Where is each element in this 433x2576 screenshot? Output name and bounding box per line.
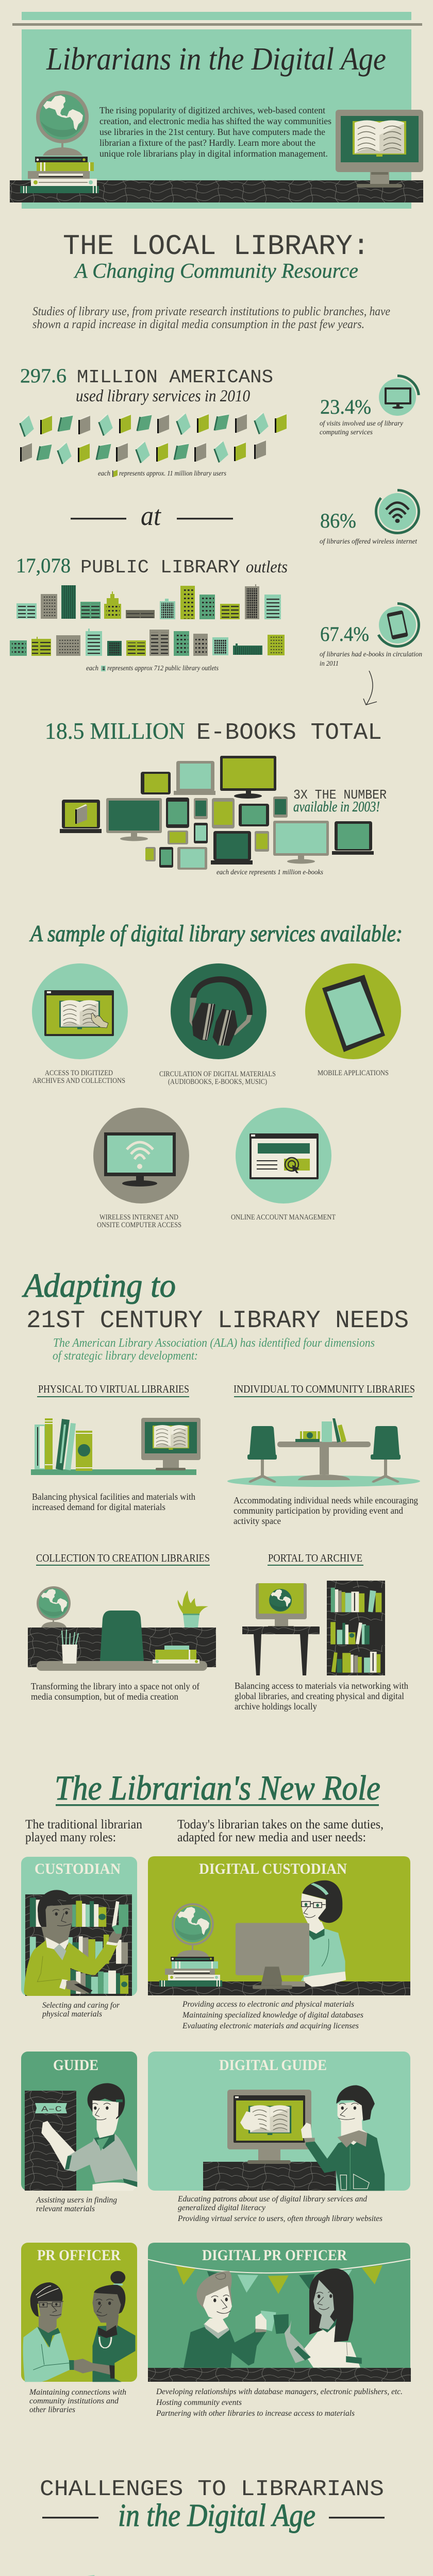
text [36,2196,117,2213]
heading: challenges: CHALLENGES TO LIBRARIANS [40,2477,384,2502]
stat: 67.4% e-books [320,604,422,667]
text: Assisting users in finding [36,2196,117,2205]
text: Maintaining specialized knowledge of digital databases [182,2011,363,2020]
legend: books: each [98,470,110,478]
panel: digital guide [148,2052,410,2223]
text [177,2195,382,2223]
caption: devices: each device represents 1 million e-books [216,869,323,876]
panel: collection to creation: COLLECTION TO CREATION LIBRARIES [36,1552,210,1564]
heading: CUSTODIAN [35,1860,121,1877]
stat: 67.4% e-books: 67.4% [320,622,369,646]
stat: 67.4% e-books: of libraries had e-books in circulation [320,650,422,658]
stat: 17,078 public library outlets: outlets [246,558,288,577]
intro: today's librarian [177,1818,384,1844]
service: circulation [159,963,276,1086]
illustration: two people shaking hands [23,2271,135,2382]
service: circulation: CIRCULATION OF DIGITAL MATERIALS [159,1070,276,1078]
intro: traditional librarian: The traditional librarian [25,1818,142,1832]
intro: today's librarian: adapted for new media and user needs: [177,1831,366,1844]
text: Educating patrons about use of digital library services and [177,2195,368,2204]
illustration: man at bookcase [24,1890,128,1996]
stat: 297.6 million americans: MILLION AMERICANS [77,367,273,388]
intro: traditional librarian [25,1818,142,1844]
stat: 18.5 million e-books [45,718,382,746]
stat: 86% wireless: 86% [320,509,356,532]
heading: the local library: THE LOCAL LIBRARY: [63,230,370,263]
scene: desk [28,1586,216,1671]
pictogram: buildings row 1 [16,584,281,619]
intro text: unique role librarians play in digital information management. [99,148,328,159]
intro text: The rising popularity of digitized archives, web-based content [99,105,325,115]
text: Selecting and caring for [42,2001,120,2010]
text: Partnering with other libraries to increase access to materials [156,2409,355,2418]
text [29,2388,126,2414]
text: Balancing physical facilities and materials with [32,1492,195,1502]
text: community participation by providing event and [234,1505,403,1516]
illustration: man at monitor [301,2085,385,2191]
text: Developing relationships with database managers, electronic publishers, etc. [156,2387,403,2396]
divider: at: at [141,500,162,531]
stat: 23.4% computing [320,376,419,436]
stat: 23.4% computing: computing services [320,428,373,436]
panel: physical to virtual [31,1383,201,1512]
service: archives [32,963,128,1085]
text: increased demand for digital materials [32,1502,165,1512]
title: Librarians in the Digital Age [46,42,386,77]
ALA intro: The American Library Association (ALA) has identified four dimensions [53,1336,375,1350]
illustration: woman pointing [41,2083,137,2191]
sign: A-C: A–C [41,2105,62,2114]
illustration: woman at computer [236,1880,346,1989]
service: archives: ARCHIVES AND COLLECTIONS [32,1077,125,1085]
challenge: publisher restrictions [47,2575,191,2576]
ALA intro [53,1336,375,1363]
illustration: monitor with book [227,2090,311,2164]
text [42,2001,120,2019]
pictogram: books row 2 [20,439,266,464]
heading: adapting [22,1267,409,1335]
heading: the local library [63,230,370,282]
panel: portal to archive [235,1552,408,1711]
arrow [363,671,377,705]
text [182,2000,363,2030]
scene: table and chairs [227,1418,420,1487]
illustration: woman with cup [285,2268,362,2368]
callout: 3x the number: available in 2003! [293,799,380,815]
stat: 297.6 million americans [18,365,287,478]
heading: DIGITAL PR OFFICER [202,2247,347,2264]
text: Maintaining connections with [29,2388,126,2397]
panel: portal to archive: PORTAL TO ARCHIVE [268,1552,362,1564]
pictogram: books row 1 [18,411,287,437]
illustration: bunting [148,2259,410,2294]
panel: guide [21,2052,137,2213]
text: community institutions and [29,2397,119,2405]
text: Hosting community events [156,2398,242,2407]
heading: challenges [40,2477,385,2533]
text: global libraries, and creating physical and digital [235,1691,404,1701]
service: wireless [93,1108,189,1229]
stat: 17,078 public library outlets: 17,078 [16,554,71,577]
text [32,1492,195,1512]
intro paragraph: Studies of library use, from private research institutions to public branches, have [32,305,390,318]
text: Evaluating electronic materials and acquiring licenses [182,2022,359,2030]
panel: collection to creation [28,1552,216,1702]
service: wireless: WIRELESS INTERNET AND [99,1213,178,1222]
illustration: globe on books [159,1903,222,1987]
heading: the librarian's new role: The Librarian's New Role [55,1768,380,1807]
text: Balancing access to materials via networking with [235,1681,408,1691]
intro text: creation, and electronic media has shifted the way communities [99,116,331,126]
legend: buildings: represents approx 712 public library outlets [107,665,219,672]
text: Transforming the library into a space not only of [31,1681,199,1691]
subheading: A Changing Community Resource [73,259,358,282]
scene: monitor, table and bookcase [242,1581,385,1675]
icon: cd and tablet with hands [53,2575,191,2576]
ALA intro: of strategic library development: [53,1349,198,1363]
service: wireless: ONSITE COMPUTER ACCESS [97,1221,181,1229]
stat: 23.4% computing: of visits involved use of library [320,419,403,427]
panel: digital custodian [148,1856,410,2030]
pictogram: devices [60,756,374,870]
service: account: ONLINE ACCOUNT MANAGEMENT [231,1213,336,1222]
header panel [10,12,423,209]
text [31,1681,199,1702]
text: archive holdings locally [235,1701,317,1711]
desk band [10,180,423,202]
legend: buildings: each [86,665,98,672]
text: activity space [234,1516,281,1526]
intro paragraph [32,305,390,331]
text: Providing access to electronic and physical materials [182,2000,354,2009]
heading: PR OFFICER [37,2247,121,2264]
service: circulation: (AUDIOBOOKS, E-BOOKS, MUSIC) [168,1078,267,1086]
text [234,1495,418,1526]
heading: adapting: Adapting to [22,1267,176,1304]
shelf rail [12,20,422,29]
text [156,2387,403,2418]
text: relevant materials [36,2205,95,2213]
service: mobile apps [305,963,401,1077]
panel: custodian [21,1857,137,2019]
service: mobile apps: MOBILE APPLICATIONS [318,1069,389,1077]
text: Providing virtual service to users, often through library websites [177,2214,382,2223]
heading: challenges: in the Digital Age [118,2498,315,2533]
panel: pr officer [21,2243,137,2414]
stat: 18.5 million e-books: 18.5 MILLION [45,718,185,744]
service: archives: ACCESS TO DIGITIZED [45,1069,113,1077]
service: account [231,1108,336,1222]
icon: globe on books [20,91,99,193]
illustration: man with cup [184,2271,289,2368]
stat: 297.6 million americans: 297.6 [20,365,66,387]
stat: 86% wireless [320,490,419,545]
stat: 18.5 million e-books: E-BOOKS TOTAL [196,720,382,746]
text: physical materials [42,2010,102,2019]
heading: DIGITAL GUIDE [219,2057,327,2074]
intro text: librarian a fixture of the past? Hardly. Learn more about the [99,138,315,148]
callout: 3x the number [293,787,387,815]
pictogram: buildings row 2 [10,629,285,656]
text [235,1681,408,1711]
intro: today's librarian: Today's librarian takes on the same duties, [177,1818,384,1832]
stat: 86% wireless: of libraries offered wireless internet [320,537,418,545]
stat: 23.4% computing: 23.4% [320,395,371,418]
panel: physical to virtual: PHYSICAL TO VIRTUAL LIBRARIES [38,1383,189,1395]
callout: 3x the number: 3X THE NUMBER [293,787,387,803]
stat: 17,078 public library outlets [10,554,288,672]
scene: shelf with books and monitor [31,1418,201,1475]
legend: books: represents approx. 11 million library users [119,470,226,478]
heading: GUIDE [53,2057,98,2074]
icon: monitor with book [336,110,423,188]
text: other libraries [29,2405,75,2414]
heading: adapting: 21ST CENTURY LIBRARY NEEDS [26,1307,409,1335]
stat: 17,078 public library outlets: PUBLIC LIBRARY [80,557,240,578]
panel: individual to community [227,1383,420,1526]
stat: 67.4% e-books: in 2011 [320,659,339,667]
text: Accommodating individual needs while encouraging [234,1495,418,1505]
intro: traditional librarian: played many roles: [25,1831,116,1844]
divider: at [71,500,233,531]
text: generalized digital literacy [178,2204,266,2212]
sign: A-C [35,2103,67,2114]
intro paragraph: shown a rapid increase in digital media consumption in the past few years. [32,318,364,331]
intro text [99,105,331,159]
text: media consumption, but of media creation [31,1691,178,1702]
heading: DIGITAL CUSTODIAN [199,1860,347,1877]
stat: 297.6 million americans: used library services in 2010 [76,387,250,405]
panel: digital pr officer [148,2243,411,2418]
intro text: use libraries in the 21st century. But have computers made the [99,127,325,137]
